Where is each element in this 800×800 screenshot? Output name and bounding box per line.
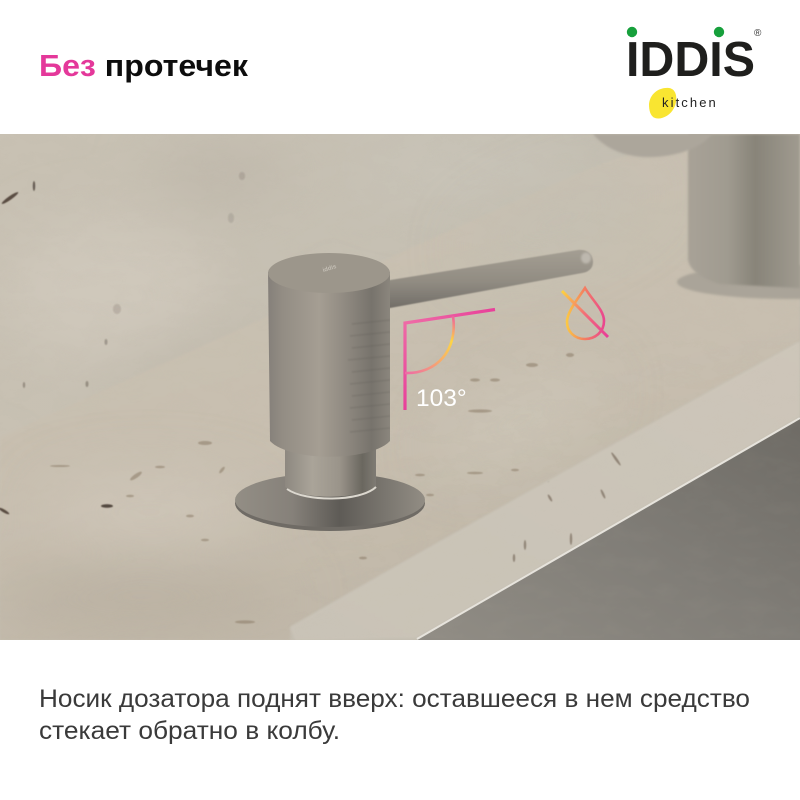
neck white ring [287, 487, 376, 499]
angle lines [405, 310, 495, 410]
logo kitchen word: kitchen [662, 95, 718, 110]
dispenser spout [383, 250, 593, 308]
sink steel panel [417, 417, 800, 640]
white sink edge highlight [417, 418, 800, 639]
drop slash [562, 291, 608, 337]
product photo panel [0, 130, 800, 640]
wall light and dark patches [5, 142, 600, 419]
spout tip highlight [581, 252, 591, 264]
wall grain [0, 134, 800, 434]
angle marker [405, 310, 495, 412]
faucet body [688, 134, 800, 288]
dark wall and ledge pits [0, 172, 246, 515]
logo wordmark: IDDIS [626, 32, 755, 87]
stone wall [0, 134, 800, 640]
logo green dot right [714, 27, 724, 37]
base plate top [235, 473, 425, 527]
cylinder body [268, 272, 390, 457]
neck [285, 440, 376, 497]
angle value: 103° [416, 385, 467, 412]
faucet spout underside [594, 134, 688, 158]
stone lip front edge [290, 341, 800, 640]
description line 1: Носик дозатора поднят вверх: оставшееся в нем средство [39, 685, 750, 713]
ledge grain [0, 130, 800, 640]
lip grain [295, 341, 800, 638]
background faucet [593, 134, 800, 299]
soap dispenser [235, 250, 593, 531]
base plate edge [235, 475, 425, 531]
lip pits [513, 452, 622, 562]
ledge shading [0, 155, 664, 630]
description text [39, 685, 750, 745]
cap logo mark: iddis [322, 264, 338, 274]
cylinder top cap [268, 253, 390, 293]
drop outline [567, 288, 604, 339]
angle arc [405, 316, 454, 373]
ledge pits [50, 353, 574, 624]
logo green dot left [627, 27, 637, 37]
icon: crossed-out drop [562, 288, 608, 339]
logo: IDDIS kitchen [626, 27, 762, 119]
logo yellow blob [649, 88, 676, 119]
description line 2: стекает обратно в колбу. [39, 717, 340, 745]
cylinder brushed streaks [348, 320, 390, 432]
stone ledge top [260, 154, 798, 638]
logo registered mark: ® [754, 28, 762, 39]
title: Без протечек [39, 48, 248, 83]
faucet base ring [677, 265, 800, 299]
